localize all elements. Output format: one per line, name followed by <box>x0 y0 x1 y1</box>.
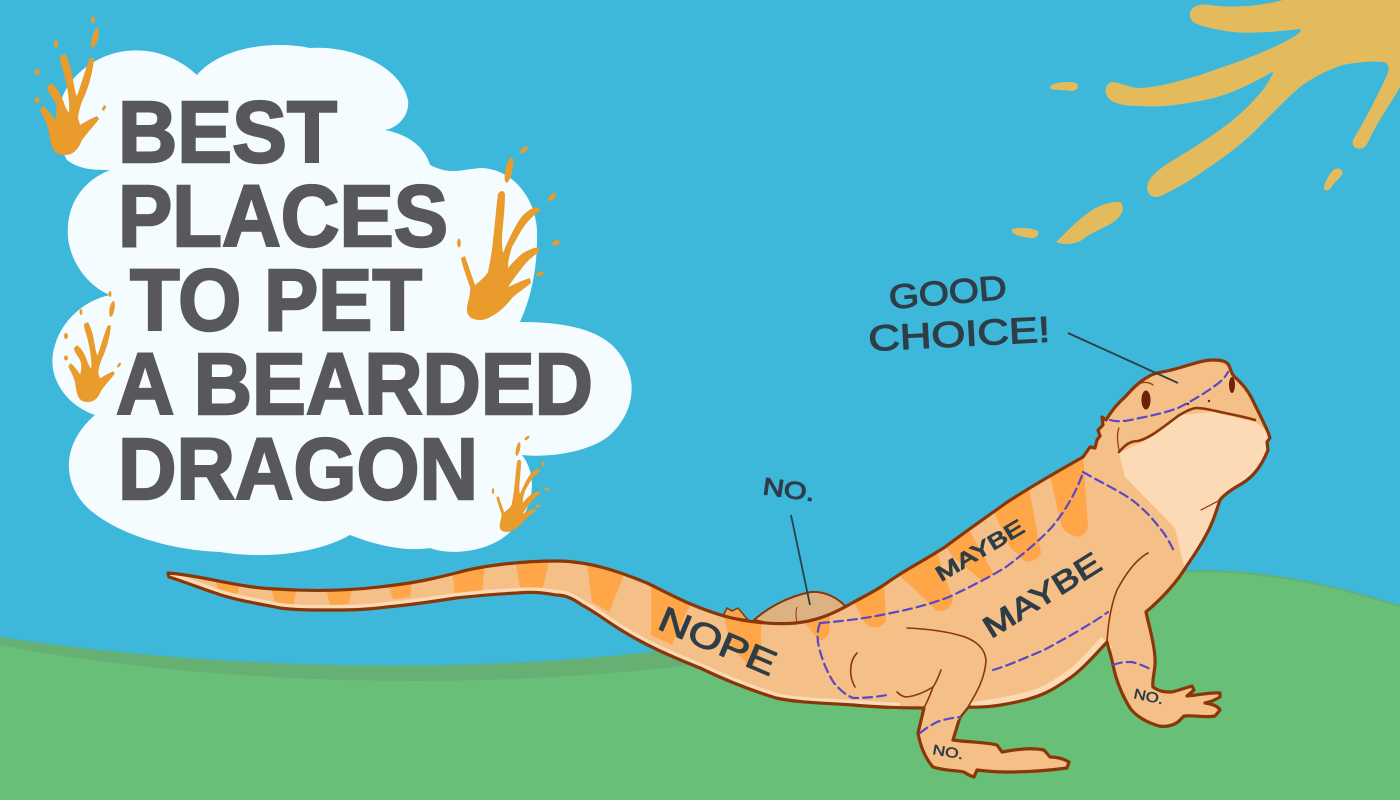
orange stripes and pale belly <box>169 412 1275 712</box>
label: NO on back foot: NO. <box>931 741 965 762</box>
body contour lines <box>851 382 1255 717</box>
paint splash: left of title <box>64 291 122 402</box>
callout: GOOD CHOICE <box>867 269 1178 383</box>
cloud behind title <box>52 45 632 555</box>
nostril <box>1229 377 1235 393</box>
label: NOPE: NOPE <box>653 599 782 684</box>
hind leg fill covering belly <box>924 660 985 722</box>
grass hills <box>0 570 1400 800</box>
title text <box>116 84 593 518</box>
callout: GOOD CHOICE: GOOD <box>887 269 1008 317</box>
title text: DRAGON <box>118 421 478 518</box>
title text: BEST <box>118 84 337 181</box>
purple dashed petting zones <box>818 372 1228 733</box>
paint splash: top left <box>34 16 107 155</box>
body fill <box>168 360 1270 777</box>
paint splash: right of title <box>457 145 561 320</box>
label: MAYBE on side: MAYBE <box>977 546 1107 645</box>
label: NO on front foot: NO. <box>1132 685 1165 707</box>
label: MAYBE on back: MAYBE <box>932 516 1028 586</box>
throat <box>1119 412 1275 575</box>
head spots <box>1187 400 1210 405</box>
sun with rays <box>1012 0 1400 244</box>
callout: NO on hidden leg: NO. <box>761 473 816 507</box>
callout: NO on hidden leg <box>761 473 816 605</box>
paint splash: bottom right of title <box>492 435 550 532</box>
eye <box>1142 390 1150 410</box>
title text: TO PET <box>130 252 422 349</box>
body outline <box>168 360 1270 777</box>
title text: PLACES <box>118 168 448 265</box>
far hind leg behind body <box>723 592 846 630</box>
bearded dragon <box>168 360 1275 777</box>
title text: A BEARDED <box>116 336 593 433</box>
callout: GOOD CHOICE: CHOICE! <box>867 309 1051 359</box>
